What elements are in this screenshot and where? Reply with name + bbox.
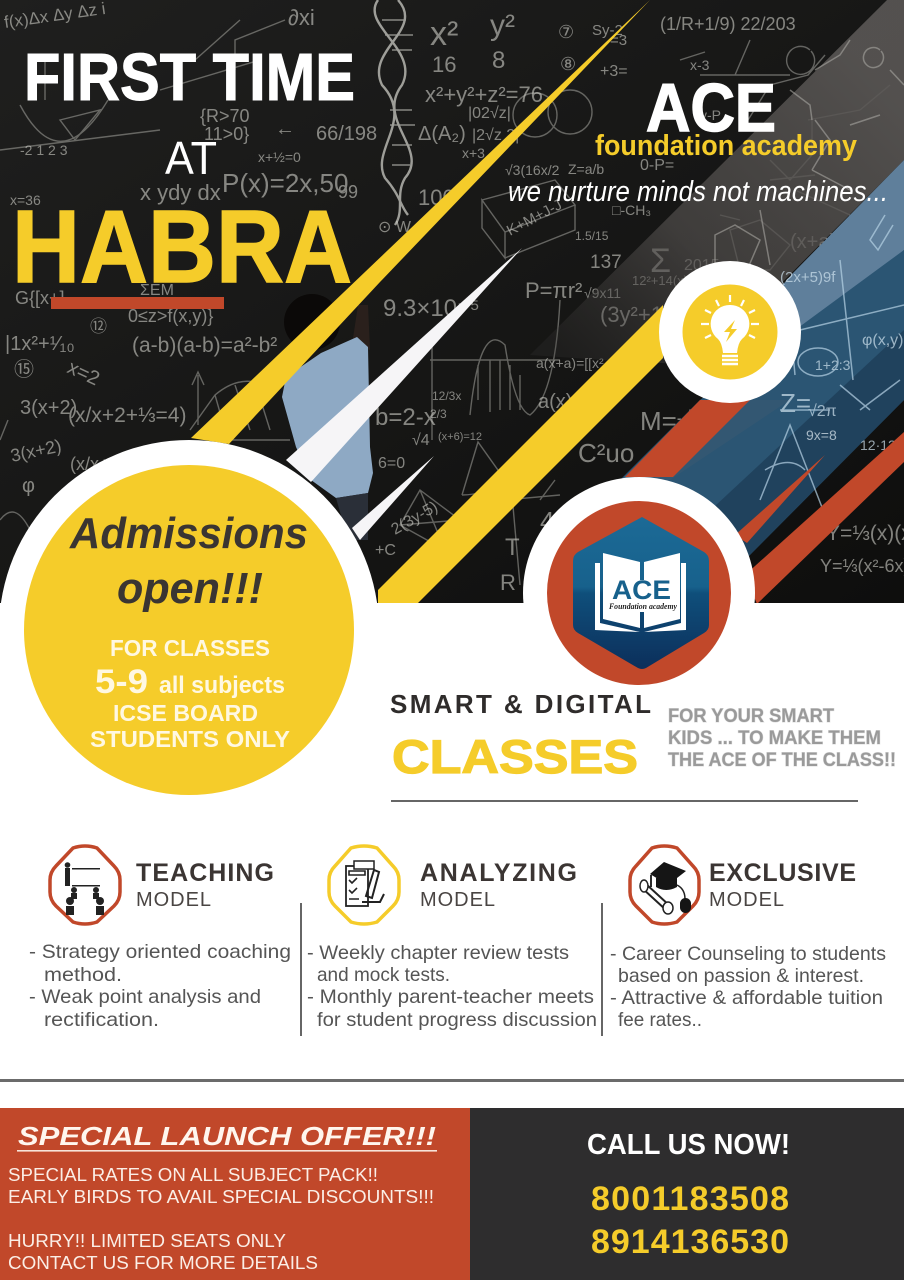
panel: teaching model: MODEL <box>136 889 211 911</box>
yellow sliver stripe <box>191 0 650 444</box>
exclusive bullet list: - Career Counseling to students <box>610 943 886 965</box>
admissions heading: Admissions <box>69 509 308 558</box>
chalk formulas <box>0 0 904 595</box>
chalk formulas: 8 <box>492 47 505 74</box>
chalk formulas: Δ(A₂) <box>418 123 466 145</box>
analyzing bullet list: - Weekly chapter review tests <box>307 942 569 964</box>
chalk formulas: 4 <box>540 506 554 536</box>
translucent blue bands: (2x+5)9f <box>780 269 836 286</box>
translucent blue bands: 1+2:3 <box>815 357 851 373</box>
chalk formulas: +C <box>375 542 396 559</box>
classes details: ICSE BOARD <box>113 700 258 726</box>
translucent blue bands: 12·12 <box>860 437 896 453</box>
chalk formulas: φ <box>22 475 35 497</box>
chalk formulas: G{[x+] <box>15 288 65 308</box>
brand block: ACE foundation academy <box>508 70 888 208</box>
chalkboard background <box>0 0 904 603</box>
translucent blue bands: φ(x,y) <box>862 332 903 349</box>
chalk formulas: x-3 <box>690 57 710 73</box>
chalk formulas: ⑮ <box>14 358 34 381</box>
admissions heading <box>69 509 308 613</box>
logo circle: ACE book emblem: ACE <box>612 575 671 605</box>
panel: teaching model <box>29 846 291 1031</box>
chalk formulas: 1.5/15 <box>575 229 609 243</box>
chalk formulas: 3(x+2) <box>9 436 63 466</box>
panel: teaching model: TEACHING <box>136 859 274 887</box>
gray band chalk <box>715 40 904 275</box>
chalk formulas: K+M+J-J <box>504 196 565 240</box>
tagline <box>668 706 896 771</box>
exclusive bullet list <box>610 943 886 1031</box>
chalk formulas: -2 1 2 3 <box>20 142 68 158</box>
chalk formulas: x²+y²+z²=76 <box>425 82 543 107</box>
chalk formulas: P=πr² <box>525 278 582 303</box>
panel: special launch offer: SPECIAL LAUNCH OFFER!!! <box>18 1121 436 1151</box>
chalk formulas: x+3 <box>462 145 485 161</box>
panel: special launch offer: HURRY!! LIMITED SEATS ONLY <box>8 1231 286 1251</box>
chalk formulas: |1x²+¹⁄₁₀ <box>5 333 75 355</box>
chalk formulas: ⊙ W·4 <box>378 219 425 236</box>
teaching bullet list <box>29 941 291 1031</box>
tagline: FOR YOUR SMART <box>668 706 834 727</box>
chalk formulas: y-P <box>700 107 721 123</box>
chalk formulas: ∂xi <box>288 5 315 30</box>
panel: exclusive model: EXCLUSIVE <box>709 859 856 887</box>
chalk formulas: P(x)=2x,50 <box>222 168 348 198</box>
translucent blue bands: √2π <box>808 403 837 420</box>
chalk formulas: M=√ <box>640 406 692 436</box>
panel: call us now: CALL US NOW! <box>587 1129 790 1161</box>
panel: exclusive model: MODEL <box>709 889 784 911</box>
chalk formulas: 2/3 <box>430 407 447 421</box>
panel: analyzing model <box>307 846 597 1031</box>
headline: first time at Habra <box>12 40 355 309</box>
chalk formulas: +3= <box>600 63 628 80</box>
panel: call us now: 8914136530 <box>591 1223 789 1261</box>
chalk formulas: T <box>505 534 520 561</box>
chalk formulas: {R>70 <box>200 106 250 126</box>
chalk formulas: ΣEM <box>140 282 174 299</box>
classes details <box>90 635 290 752</box>
admissions heading: open!!! <box>117 564 263 613</box>
boy at the chalkboard <box>282 294 373 540</box>
analyzing bullet list <box>307 942 597 1031</box>
brand block: ACE foundation academy: foundation academy <box>595 130 857 162</box>
chalk formulas: 137 <box>590 252 622 273</box>
chalk formulas: (a-b)(a-b)=a²-b² <box>132 334 277 357</box>
classes details: FOR CLASSES <box>110 635 270 661</box>
chalk formulas: 12/3x <box>432 389 461 403</box>
chalk formulas: (x+6)=12 <box>438 431 482 443</box>
exclusive bullet list: - Attractive & affordable tuition <box>610 987 883 1009</box>
chalk formulas: a(x) <box>538 391 572 413</box>
icon: analyzing <box>329 846 399 924</box>
translucent gray band <box>530 0 904 365</box>
panel: special launch offer: CONTACT US FOR MORE DETAILS <box>8 1253 318 1273</box>
chalk formulas: |02√z| <box>468 105 511 122</box>
chalk formulas: x=2 <box>64 357 103 390</box>
DNA helix <box>375 0 415 225</box>
chalk formulas: 0≤z>f(x,y)} <box>128 306 213 326</box>
chalk formulas: a(x+a)=[[x² <box>536 355 604 371</box>
chalk formulas: 2(3y-5) <box>388 498 441 538</box>
chalk formulas: 2015 <box>684 257 720 274</box>
chalk formulas: x² <box>430 15 458 53</box>
headline: first time at Habra: AT <box>165 132 217 184</box>
chalk formulas: x ydy dx <box>140 180 221 205</box>
chalk formulas: 11>0} <box>204 124 249 144</box>
chalk formulas: Σ <box>650 242 671 280</box>
chalk formulas: (3y²+1) <box>600 302 670 327</box>
icon: light bulb circle <box>659 261 801 403</box>
analyzing bullet list: and mock tests. <box>317 964 450 986</box>
chalk formulas: 3(x+2) <box>20 397 77 419</box>
chalk formulas: Sy-2 <box>592 22 623 39</box>
brand block: ACE foundation academy: ACE <box>646 70 776 146</box>
chalk formulas: ⑫ <box>90 317 107 336</box>
logo circle: ACE book emblem <box>523 477 755 709</box>
chalk formulas: □-CH₃ <box>612 202 651 218</box>
exclusive bullet list: fee rates.. <box>618 1009 702 1031</box>
panel: exclusive model <box>610 846 886 1031</box>
chalk formulas: C²uo <box>578 438 634 468</box>
chalk formulas: 100 <box>418 185 455 210</box>
translucent blue bands: 9x=8 <box>806 427 837 443</box>
panel: special launch offer: EARLY BIRDS TO AVAIL SPECIAL DISCOUNTS!!! <box>8 1187 434 1207</box>
tagline: KIDS ... TO MAKE THEM <box>668 728 881 749</box>
analyzing bullet list: - Monthly parent-teacher meets <box>307 986 594 1008</box>
chalk formulas: (x/x+2+⅓=4) <box>68 404 186 427</box>
icon: exclusive <box>630 846 699 924</box>
chalk formulas: ⑦ <box>558 22 574 42</box>
chalk formulas: 6=0 <box>378 455 405 472</box>
chalk formulas: 12²+14(x) <box>632 273 688 288</box>
chalk formulas: (x/x+ <box>70 454 110 474</box>
chalk formulas: ← <box>275 118 295 140</box>
chalk formulas: Z=a/b <box>568 161 604 177</box>
panel: analyzing model: ANALYZING <box>420 859 577 887</box>
chalk formulas: (x+a)ⁿ <box>790 231 843 253</box>
smart and digital classes heading: CLASSES <box>392 730 638 783</box>
smart and digital classes heading: SMART & DIGITAL <box>390 689 651 719</box>
translucent blue bands <box>620 160 904 560</box>
white lower page <box>0 603 904 1280</box>
chalk formulas: √4 <box>412 432 430 449</box>
exclusive bullet list: based on passion & interest. <box>618 965 864 987</box>
chalk formulas: x=36 <box>10 192 41 208</box>
chalk formulas: 9.3×10⁻⁵ <box>383 295 480 322</box>
chalk formulas: |2√z 2| <box>472 127 519 144</box>
chalk formulas: √3(16x/2 <box>505 162 560 178</box>
chalk formulas: 99 <box>338 182 358 202</box>
chalk formulas: R <box>500 570 516 595</box>
chalk formulas: 0-P= <box>640 157 674 174</box>
teaching bullet list: rectification. <box>44 1009 159 1031</box>
panel: call us now: 8001183508 <box>591 1180 789 1218</box>
chalk formulas: b=2-x <box>375 404 436 431</box>
panel: special launch offer: SPECIAL RATES ON ALL SUBJECT PACK!! <box>8 1165 378 1185</box>
red stripes <box>625 400 904 604</box>
chalk formulas: x+½=0 <box>258 149 301 165</box>
chalk formulas: =3 <box>610 32 627 49</box>
admissions open circle <box>0 440 379 820</box>
classes details: all subjects <box>159 672 285 699</box>
icon: teaching <box>50 846 120 924</box>
wide yellow stripe <box>378 305 663 643</box>
tagline: THE ACE OF THE CLASS!! <box>668 750 896 771</box>
classes details: 5-9 <box>95 663 148 701</box>
chalk formulas: 16 <box>432 52 456 77</box>
headline: first time at Habra: HABRA <box>12 189 352 304</box>
teaching bullet list: method. <box>44 964 122 986</box>
logo circle: ACE book emblem: Foundation academy <box>608 602 677 611</box>
smart and digital classes heading <box>390 689 651 783</box>
headline: first time at Habra: FIRST TIME <box>24 40 355 115</box>
translucent blue bands: Z= <box>780 388 811 418</box>
panel: special launch offer <box>0 1108 470 1280</box>
panel: call us now <box>470 1108 904 1280</box>
chalk formulas: √9x11 <box>584 285 621 301</box>
white sliver stripes <box>286 248 522 540</box>
classes details: STUDENTS ONLY <box>90 726 290 752</box>
chalk formulas: (1/R+1/9) 22/203 <box>660 14 796 34</box>
teaching bullet list: - Strategy oriented coaching <box>29 941 291 963</box>
analyzing bullet list: for student progress discussion <box>317 1009 597 1031</box>
teaching bullet list: - Weak point analysis and <box>29 986 261 1008</box>
chalk formulas: ⑧ <box>560 54 576 74</box>
chalk formulas: y² <box>490 9 515 42</box>
panel: analyzing model: MODEL <box>420 889 495 911</box>
chalk formulas: 66/198 <box>316 123 377 145</box>
